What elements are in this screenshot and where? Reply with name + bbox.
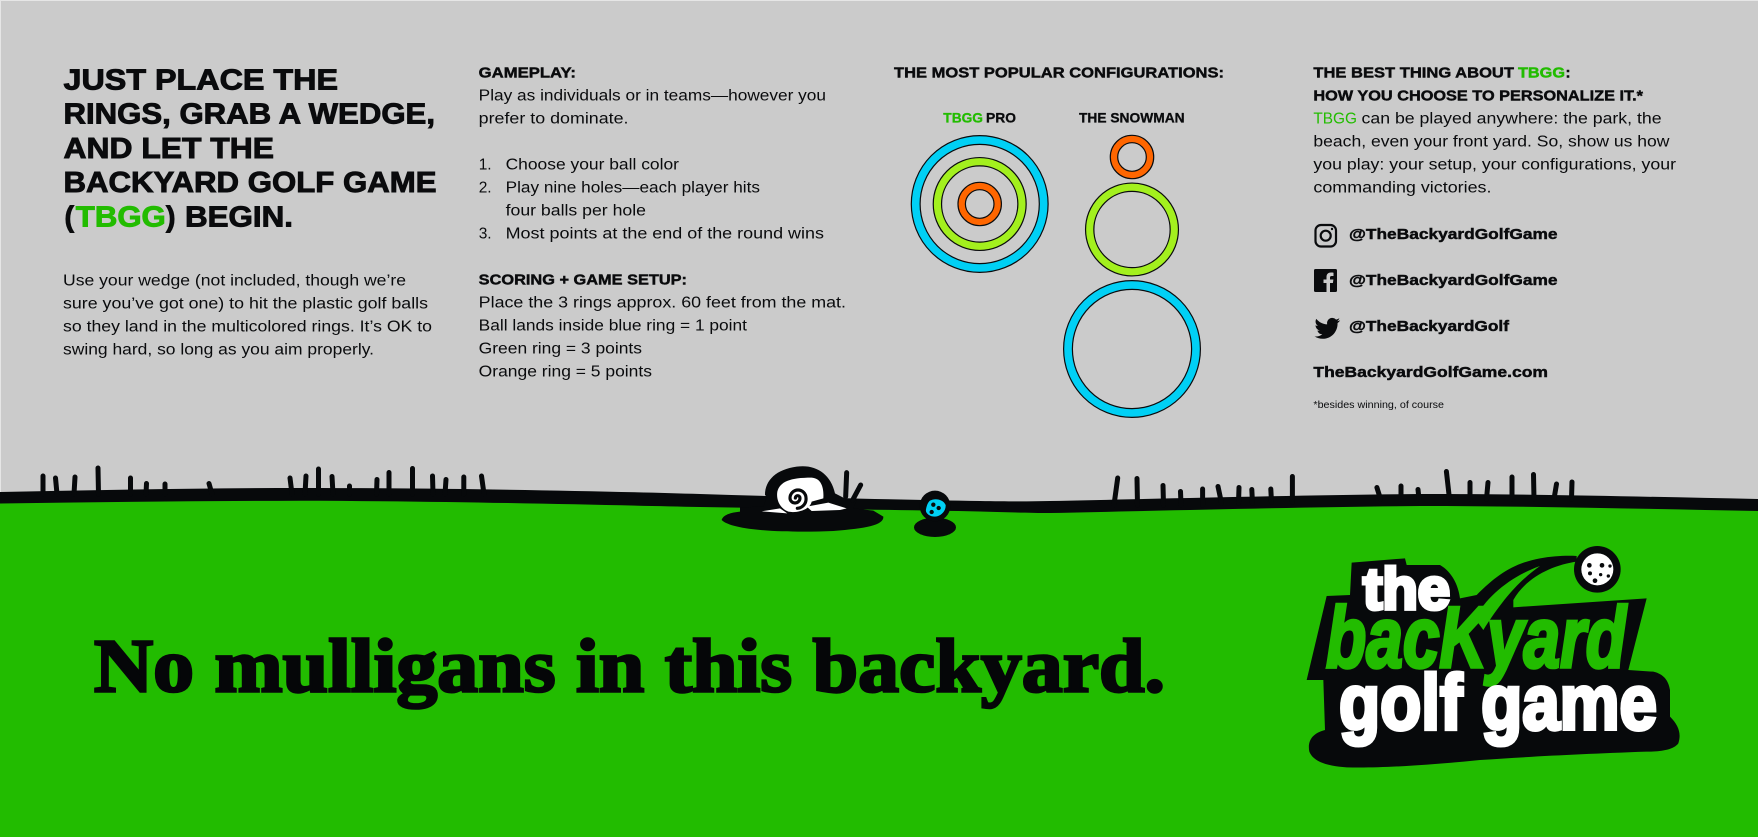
label: The Snowman: THE SNOWMAN — [1079, 110, 1185, 126]
diagram: Snowman stacked rings — [1068, 139, 1196, 413]
heading: best thing about TBGG: TBGG — [1518, 64, 1565, 82]
logo words: golf game: golf game — [1339, 658, 1657, 746]
footnote: *besides winning, of course — [1313, 399, 1444, 411]
heading: best thing about TBGG: : — [1566, 64, 1570, 82]
social handle: facebook: @TheBackyardGolfGame — [1349, 272, 1558, 289]
lawn — [0, 493, 1758, 837]
tagline: No mulligans in this backyard. — [94, 624, 1165, 708]
intro paragraph: Use your wedge (not included, though we’re — [63, 272, 406, 290]
heading: intro: AND LET THE — [64, 133, 274, 165]
gameplay intro text: Play as individuals or in teams—however you — [479, 88, 826, 104]
gameplay numbered steps — [479, 156, 824, 242]
heading: intro: ) — [166, 202, 176, 234]
gameplay intro text — [479, 88, 826, 128]
gameplay numbered steps: 1. — [479, 156, 492, 174]
heading: intro: BEGIN. — [185, 202, 293, 234]
logo swoosh — [1475, 566, 1540, 630]
heading: intro: JUST PLACE THE — [64, 64, 338, 96]
website: TheBackyardGolfGame.com — [1313, 364, 1548, 381]
gameplay numbered steps: 3. — [479, 226, 492, 242]
heading: best thing about TBGG: HOW YOU CHOOSE TO PERSONALIZE IT.* — [1313, 88, 1643, 104]
social handle: instagram: @TheBackyardGolfGame — [1349, 226, 1558, 243]
scoring rules text — [479, 294, 846, 380]
logo word: backyard: bacKyard — [1326, 590, 1627, 686]
logo golf ball — [1581, 553, 1613, 585]
label: TBGG Pro: TBGG — [943, 110, 983, 126]
panel: personalize and social — [1313, 64, 1676, 411]
intro paragraph — [63, 272, 432, 358]
panel: intro — [63, 64, 436, 358]
logo: the backyard golf game — [1307, 546, 1680, 768]
heading: intro — [64, 64, 436, 234]
icon: golf ball on tee — [914, 491, 956, 537]
heading: intro: BACKYARD GOLF GAME — [64, 167, 436, 199]
icon: facebook — [1314, 269, 1337, 292]
gameplay intro text: prefer to dominate. — [479, 110, 628, 128]
intro paragraph: sure you’ve got one) to hit the plastic golf balls — [63, 296, 428, 312]
icon: instagram — [1316, 225, 1336, 246]
scoring rules text: Place the 3 rings approx. 60 feet from the mat. — [479, 294, 846, 312]
heading: best thing about TBGG: THE BEST THING ABOUT — [1313, 64, 1514, 82]
social handle: twitter: @TheBackyardGolf — [1349, 318, 1510, 335]
personalize paragraph: commanding victories. — [1313, 180, 1492, 196]
gameplay numbered steps: Most points at the end of the round wins — [506, 226, 824, 242]
icon: twitter — [1314, 318, 1340, 339]
label: TBGG Pro — [943, 110, 1016, 126]
personalize paragraph: can be played anywhere: the park, the — [1362, 110, 1662, 128]
personalize paragraph: beach, even your front yard. So, show us how — [1313, 134, 1670, 150]
heading: intro: RINGS, GRAB A WEDGE, — [64, 99, 435, 131]
gameplay numbered steps: four balls per hole — [506, 202, 646, 220]
personalize paragraph: TBGG — [1313, 110, 1357, 128]
diagram: TBGG Pro concentric rings — [916, 140, 1044, 268]
heading: scoring and game setup: SCORING + GAME SETUP: — [479, 272, 687, 288]
scoring rules text: Orange ring = 5 points — [479, 364, 652, 380]
gameplay numbered steps: Choose your ball color — [506, 156, 679, 174]
gameplay numbered steps: 2. — [479, 180, 492, 196]
heading: intro: ( — [64, 202, 74, 234]
label: TBGG Pro: PRO — [986, 110, 1016, 126]
sky edge highlight — [0, 0, 1758, 520]
horizon ground line with grass blades — [0, 468, 1758, 513]
intro paragraph: swing hard, so long as you aim properly. — [63, 342, 374, 358]
heading: intro: TBGG — [76, 202, 166, 234]
icon: snail — [722, 466, 883, 532]
gameplay numbered steps: Play nine holes—each player hits — [506, 180, 760, 196]
scoring rules text: Ball lands inside blue ring = 1 point — [479, 318, 748, 334]
heading: gameplay: GAMEPLAY: — [479, 64, 576, 82]
panel: configurations — [894, 64, 1224, 413]
logo backing shape — [1307, 546, 1680, 768]
heading: best thing about TBGG — [1313, 64, 1643, 104]
personalize paragraph — [1313, 110, 1676, 196]
heading: most popular configurations: THE MOST POPULAR CONFIGURATIONS: — [894, 64, 1224, 82]
logo word: the: the — [1363, 557, 1450, 622]
personalize paragraph: you play: your setup, your configurations, your — [1313, 156, 1676, 174]
panel: gameplay and scoring — [479, 64, 846, 380]
scoring rules text: Green ring = 3 points — [479, 340, 642, 358]
intro paragraph: so they land in the multicolored rings. It’s OK to — [63, 318, 432, 336]
